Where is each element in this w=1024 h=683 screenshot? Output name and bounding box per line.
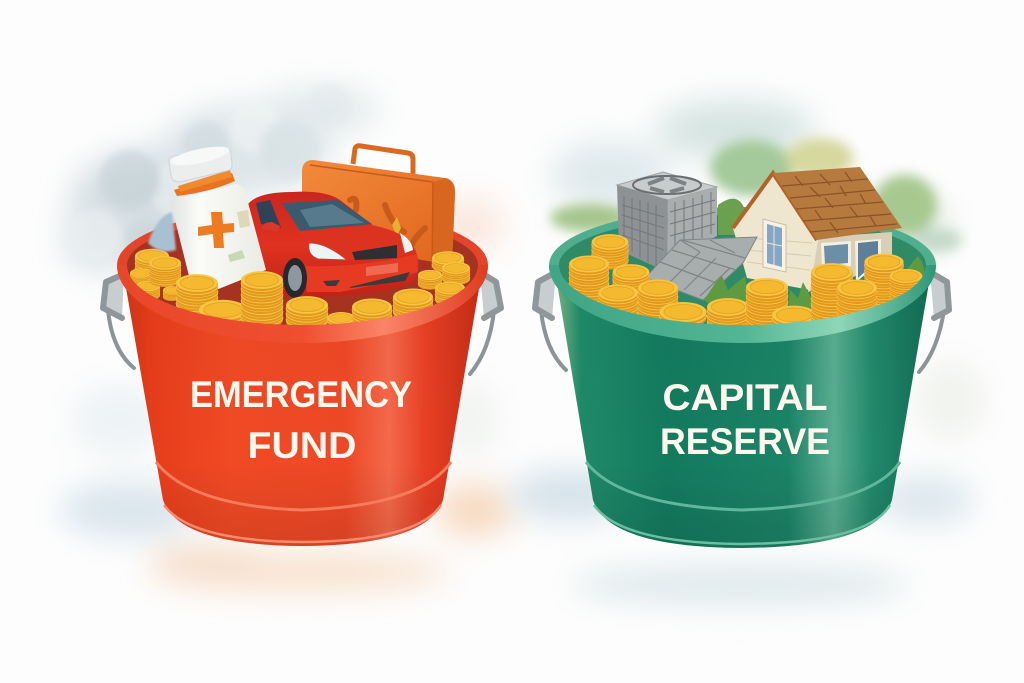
emergency fund label bbox=[190, 374, 412, 466]
icon: back coin stacks bbox=[130, 249, 181, 301]
capital reserve label: RESERVE bbox=[660, 421, 830, 462]
icon: air conditioning unit bbox=[617, 172, 717, 272]
icon: left bucket handle bbox=[535, 272, 566, 370]
capital reserve label: CAPITAL bbox=[662, 377, 828, 418]
back rim of bucket bbox=[117, 207, 488, 343]
watercolor background: emergency side bbox=[60, 83, 515, 592]
emergency fund label: FUND bbox=[248, 425, 356, 466]
bucket body bbox=[122, 265, 483, 546]
bucket bottom band bbox=[586, 462, 900, 544]
tree foliage bbox=[550, 138, 962, 252]
emergency fund bucket bbox=[103, 143, 501, 546]
smoke puffs bbox=[69, 83, 352, 261]
icon: first-aid suitcase bbox=[302, 146, 455, 268]
capital reserve label bbox=[660, 377, 830, 462]
icon: left bucket handle bbox=[103, 274, 134, 368]
bucket interior bbox=[559, 215, 926, 325]
emergency fund label: EMERGENCY bbox=[190, 374, 412, 415]
icon: coin stacks bbox=[569, 234, 922, 336]
icon: grass tufts bbox=[704, 256, 928, 312]
bucket bottom band bbox=[156, 462, 451, 542]
bucket body bbox=[554, 265, 932, 548]
icon: green shrubs bbox=[718, 199, 745, 235]
watercolor background: capital reserve side bbox=[510, 100, 984, 603]
capital reserve bucket bbox=[535, 167, 949, 548]
back rim of bucket bbox=[549, 207, 936, 343]
icon: red car bbox=[248, 192, 418, 298]
icon: roof shingles bbox=[645, 237, 757, 300]
icon: medicine bottle bbox=[169, 143, 266, 296]
icon: house bbox=[733, 167, 902, 292]
bucket interior bbox=[127, 215, 478, 325]
icon: right bucket handle bbox=[919, 272, 949, 372]
icon: right bucket handle bbox=[470, 272, 501, 374]
icon: gray cloth bbox=[148, 212, 176, 251]
bucket rim bbox=[117, 265, 488, 343]
icon: front coin stacks bbox=[176, 251, 470, 331]
bucket rim bbox=[549, 265, 936, 343]
